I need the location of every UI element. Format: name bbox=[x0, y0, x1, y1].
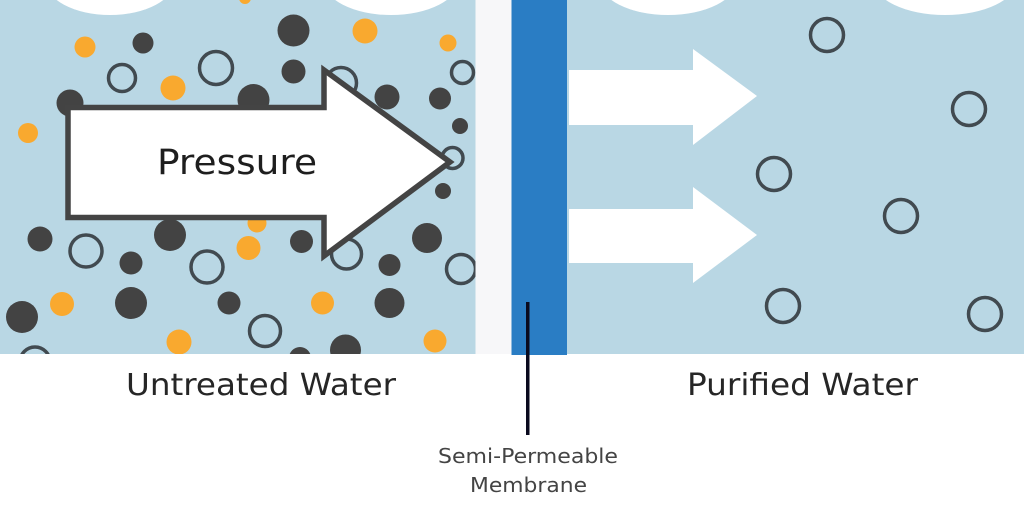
hollow particles bbox=[20, 52, 476, 377]
arrow: upper flow bbox=[569, 49, 757, 145]
arrow: lower flow bbox=[569, 187, 757, 283]
dark contaminant particles bbox=[6, 14, 468, 369]
arrow: pressure bbox=[68, 70, 450, 256]
membrane gap bbox=[476, 0, 512, 354]
pressure label: Pressure bbox=[157, 143, 317, 183]
hollow water molecules bbox=[758, 18, 1002, 330]
orange contaminant particles bbox=[18, 0, 456, 354]
semi-permeable membrane bbox=[512, 0, 567, 355]
label: purified water: Purified Water bbox=[687, 368, 919, 403]
membrane pointer line bbox=[526, 302, 530, 435]
label: semi-permeable membrane bbox=[438, 444, 618, 497]
label: semi-permeable membrane: Semi-Permeable bbox=[438, 444, 618, 468]
bubbles at top of untreated water bbox=[45, 0, 459, 15]
panel: untreated water bbox=[0, 0, 476, 354]
label: semi-permeable membrane: Membrane bbox=[470, 473, 587, 497]
panel: purified water bbox=[567, 0, 1024, 354]
bubbles at top of purified water bbox=[612, 0, 1004, 15]
label: untreated water: Untreated Water bbox=[126, 368, 397, 403]
